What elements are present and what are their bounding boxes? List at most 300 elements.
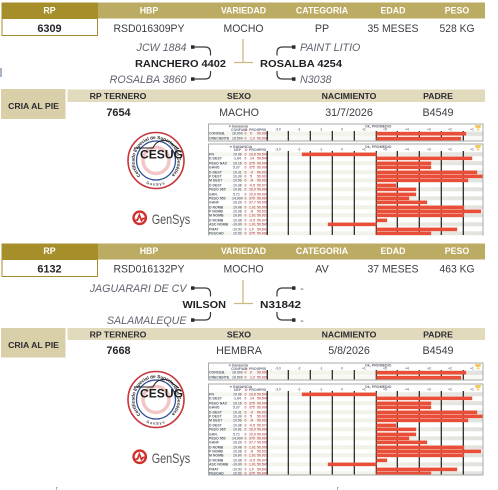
panel: trait rows: 0 bbox=[244, 414, 246, 418]
value row: animal data: 35 MESES bbox=[368, 23, 418, 35]
value row: animal data bbox=[2, 18, 474, 36]
panel: trait rows: 50.545 bbox=[257, 222, 268, 226]
panel: trait rows: PRS bbox=[259, 388, 267, 392]
seal: CESUG certificate bbox=[127, 132, 185, 190]
section: cria al pie 7654 bbox=[1, 89, 485, 119]
panel: trait rows: 14.000 bbox=[232, 196, 243, 200]
panel: trait rows: 10.20 bbox=[233, 440, 242, 444]
panel: trait rows: 10.39 bbox=[233, 414, 242, 418]
panel: trait rows: 0 bbox=[244, 188, 246, 192]
panel: trait rows: 50.000 bbox=[257, 432, 268, 436]
section: cria al pie 7668: B4549 bbox=[423, 345, 454, 357]
panel: summary rows: PROG bbox=[249, 367, 260, 371]
panel: trait rows: +2 bbox=[448, 388, 452, 392]
panel: trait rows: D NOMB bbox=[209, 446, 224, 450]
header bar: animal data: RP bbox=[43, 6, 56, 16]
panel: trait rows: 10.0 bbox=[249, 428, 256, 432]
pedigree diagram: JCW 1884 bbox=[136, 42, 187, 54]
panel: summary rows bbox=[208, 363, 483, 380]
panel: summary rows: PROG bbox=[249, 128, 260, 132]
header bar: animal data: PESO bbox=[445, 6, 469, 16]
value row: animal data: RSD016309PY bbox=[114, 23, 184, 35]
panel: trait rows: 50.070 bbox=[257, 458, 268, 462]
panel: summary rows: -3.0 bbox=[275, 128, 281, 132]
panel: trait rows: 50.037 bbox=[257, 170, 268, 174]
panel: trait rows: P DEST bbox=[209, 414, 222, 418]
panel: trait rows: -10.52 bbox=[232, 468, 242, 472]
panel: trait rows: 50.037 bbox=[257, 454, 268, 458]
panel: trait rows: 0 bbox=[244, 222, 246, 226]
panel: summary rows: PRS bbox=[259, 128, 267, 132]
panel: summary rows: +3 bbox=[427, 366, 431, 370]
seal: CESUG certificate: Certificado Especial de Superioridad Genética bbox=[131, 136, 181, 178]
panel: trait rows: -0.5 bbox=[249, 424, 255, 428]
panel: trait rows: 0 bbox=[341, 148, 343, 152]
panel: trait rows bbox=[208, 144, 483, 236]
panel: summary rows: D bbox=[245, 367, 248, 371]
panel: trait rows: 10.38 bbox=[233, 184, 242, 188]
panel: trait rows: +1 bbox=[470, 388, 474, 392]
panel: trait rows: 50.037 bbox=[257, 178, 268, 182]
panel: trait rows: 10.0 bbox=[249, 188, 256, 192]
value row: animal data: 37 MESES bbox=[368, 264, 418, 276]
panel: trait rows: -0 bbox=[250, 410, 253, 414]
panel: trait rows: +5 bbox=[383, 148, 387, 152]
section: cria al pie 7668: SEXO bbox=[227, 330, 251, 340]
panel: trait rows: 5.37 bbox=[233, 166, 240, 170]
panel: trait rows: 50.070 bbox=[257, 218, 268, 222]
panel: summary rows: +4 bbox=[405, 366, 409, 370]
panel: trait rows: 50.500 bbox=[257, 152, 268, 156]
panel: trait rows: 10.08 bbox=[233, 446, 242, 450]
panel: trait rows: DEP bbox=[234, 148, 242, 152]
panel: summary rows: +1 bbox=[362, 366, 366, 370]
panel: trait rows: 0 bbox=[244, 472, 246, 476]
section: cria al pie 7654: NACIMIENTO bbox=[322, 91, 377, 101]
panel: trait rows: 0 bbox=[244, 184, 246, 188]
panel: summary rows: 50.000 bbox=[257, 132, 268, 136]
panel: trait rows: 10.39 bbox=[233, 174, 242, 178]
panel: trait rows: -1.64 bbox=[233, 396, 241, 400]
panel: trait rows: D bbox=[245, 148, 248, 152]
panel: trait rows: D DEST bbox=[209, 424, 223, 428]
panel: trait rows: 0 bbox=[244, 454, 246, 458]
header bar: animal data: EDAD bbox=[381, 246, 405, 256]
seal: CESUG certificate: CESUG bbox=[140, 387, 183, 400]
panel: trait rows: 1.01 bbox=[249, 446, 256, 450]
panel: trait rows: 10.38 bbox=[233, 450, 242, 454]
panel: trait rows: 0 bbox=[244, 196, 246, 200]
panel: summary rows: Ok, PROMEDIO bbox=[365, 364, 392, 368]
panel: trait rows: D DEST bbox=[209, 184, 223, 188]
pedigree diagram: N31842 bbox=[260, 300, 301, 311]
panel: trait rows: 50.000 bbox=[257, 200, 268, 204]
panel: trait rows: 375 bbox=[249, 406, 255, 410]
panel: summary rows: +1 bbox=[470, 128, 474, 132]
panel: trait rows: M NOMB bbox=[209, 454, 224, 458]
panel: trait rows: 0 bbox=[244, 192, 246, 196]
section: cria al pie 7668: PADRE bbox=[423, 330, 453, 340]
panel: trait rows: +5 bbox=[383, 388, 387, 392]
panel: trait rows: 5 bbox=[250, 414, 252, 418]
panel: trait rows: 10.38 bbox=[233, 458, 242, 462]
seal: CESUG certificate: CESUG bbox=[140, 148, 183, 161]
panel: trait rows: 1.01 bbox=[249, 206, 256, 210]
section: cria al pie 7654: CRIA AL PIE bbox=[8, 101, 59, 111]
panel: trait rows: 50.540 bbox=[257, 156, 268, 160]
panel: trait rows: ASC NOMB bbox=[209, 222, 229, 226]
panel: trait rows: 0 bbox=[244, 446, 246, 450]
panel: trait rows: PN bbox=[209, 392, 214, 396]
panel: trait rows: 0 bbox=[244, 418, 246, 422]
value row: animal data: RSD016132PY bbox=[114, 264, 184, 276]
panel: trait rows: PMAT bbox=[209, 228, 220, 232]
panel: trait rows: 10.6 bbox=[249, 392, 256, 396]
section: cria al pie 7654: RP TERNERO bbox=[90, 91, 147, 101]
panel: trait rows: 50.077 bbox=[257, 424, 268, 428]
panel: trait rows: 0 bbox=[244, 170, 246, 174]
panel: trait rows: 1.01 bbox=[249, 214, 256, 218]
panel: trait rows: 0 bbox=[244, 232, 246, 236]
panel: trait rows: 50.000 bbox=[257, 472, 268, 476]
panel: trait rows: PESO 365 bbox=[209, 188, 226, 192]
panel: summary rows: 16.000 bbox=[232, 132, 243, 136]
panel: trait rows: 375 bbox=[249, 232, 255, 236]
pedigree diagram: PAINT LITIO bbox=[300, 42, 361, 54]
panel: trait rows: DEP bbox=[234, 388, 242, 392]
section: cria al pie 7668: CRIA AL PIE bbox=[8, 340, 59, 350]
panel: trait rows: 1.0 bbox=[249, 228, 254, 232]
panel: trait rows: D NOMB bbox=[209, 458, 224, 462]
seal: CESUG certificate: GenSys bbox=[146, 182, 164, 186]
panel: trait rows: 50.000 bbox=[257, 428, 268, 432]
panel: summary rows: +5 bbox=[383, 128, 387, 132]
panel: trait rows: 50.037 bbox=[257, 410, 268, 414]
panel: trait rows: 50.000 bbox=[257, 406, 268, 410]
panel: trait rows: 0 bbox=[244, 462, 246, 466]
header bar: animal data: HBP bbox=[140, 6, 158, 16]
panel: trait rows: ASC NOMB bbox=[209, 462, 229, 466]
panel: trait rows: -2 bbox=[298, 148, 301, 152]
panel: trait rows: 10.31 bbox=[233, 410, 242, 414]
panel: trait rows: 0 bbox=[244, 166, 246, 170]
panel: trait rows: 5.37 bbox=[233, 406, 240, 410]
panel: summary rows: Ok, PROMEDIO bbox=[365, 124, 392, 128]
panel: summary rows: 50.000 bbox=[257, 137, 268, 141]
panel: summary rows: CONFIAB bbox=[231, 128, 247, 132]
panel: trait rows: -10.52 bbox=[232, 228, 242, 232]
panel: trait rows: M DEST bbox=[209, 418, 223, 422]
section: cria al pie 7654: SEXO bbox=[227, 91, 251, 101]
panel: trait rows: 375 bbox=[249, 436, 255, 440]
panel: trait rows: 50.000 bbox=[257, 188, 268, 192]
panel: trait rows: 5.71 bbox=[233, 192, 240, 196]
panel: trait rows: 10.20 bbox=[233, 200, 242, 204]
section: cria al pie 7654: 31/7/2026 bbox=[325, 107, 373, 119]
seal: CESUG certificate: GenSys bbox=[146, 420, 164, 426]
panel: summary rows: +2 bbox=[448, 366, 452, 370]
section: cria al pie 7668: 7668 bbox=[106, 345, 131, 357]
panel: trait rows: 0 bbox=[244, 178, 246, 182]
panel: trait rows: 50.000 bbox=[257, 402, 268, 406]
panel: trait rows: -3.0 bbox=[275, 148, 281, 152]
panel: trait rows: 0 bbox=[244, 468, 246, 472]
panel: trait rows: -1.64 bbox=[233, 156, 241, 160]
header bar: animal data: PESO bbox=[445, 246, 469, 256]
panel: trait rows: 10.60 bbox=[233, 454, 242, 458]
section: cria al pie 7668: NACIMIENTO bbox=[322, 330, 377, 340]
panel: trait rows: ▾ GANANCIA bbox=[229, 145, 253, 149]
panel: trait rows bbox=[208, 384, 483, 476]
panel: trait rows: 50.077 bbox=[257, 184, 268, 188]
panel: summary rows: CONCEB. bbox=[209, 371, 225, 375]
panel: trait rows: -10.60 bbox=[232, 462, 242, 466]
section: animal 6309 bbox=[2, 2, 485, 86]
value row: animal data: 6132 bbox=[37, 264, 62, 276]
panel: trait rows: D DEST bbox=[209, 170, 223, 174]
panel: trait rows: D NOMB bbox=[209, 206, 224, 210]
panel: summary rows: 50.000 bbox=[257, 376, 268, 380]
panel: summary rows: CONFIAB bbox=[231, 367, 247, 371]
panel: trait rows: 0 bbox=[244, 206, 246, 210]
panel: trait rows: +2 bbox=[448, 148, 452, 152]
panel: trait rows: 0 bbox=[244, 402, 246, 406]
pedigree diagram bbox=[110, 39, 361, 86]
panel: trait rows: -0.5 bbox=[249, 458, 255, 462]
panel: trait rows: 0 bbox=[244, 200, 246, 204]
panel: summary rows: +2 bbox=[448, 128, 452, 132]
panel: trait rows: P DEST bbox=[209, 174, 222, 178]
panel: trait rows: GANO bbox=[209, 406, 220, 410]
panel: trait rows: 50.000 bbox=[257, 166, 268, 170]
panel: summary rows: 0 bbox=[244, 137, 246, 141]
panel: trait rows: 37.7 bbox=[249, 200, 256, 204]
panel: trait rows: 0 bbox=[244, 458, 246, 462]
value row: animal data: 463 KG bbox=[440, 264, 474, 276]
panel: trait rows: 10.59 bbox=[233, 178, 242, 182]
panel: trait rows: 14 bbox=[250, 396, 254, 400]
panel: trait rows: 50.000 bbox=[257, 162, 268, 166]
panel: trait rows: 0 bbox=[244, 436, 246, 440]
panel: trait rows: 0 bbox=[341, 388, 343, 392]
panel: trait rows: 375 bbox=[249, 162, 255, 166]
panel: summary rows: 0 bbox=[341, 366, 343, 370]
panel: summary rows: +1 bbox=[470, 366, 474, 370]
panel: summary rows: 16.500 bbox=[232, 376, 243, 380]
panel: trait rows: -0 bbox=[250, 170, 253, 174]
panel: trait rows: 10.31 bbox=[233, 170, 242, 174]
panel: trait rows: D DEST bbox=[209, 156, 223, 160]
panel: trait rows: D bbox=[245, 388, 248, 392]
pedigree diagram: N3038 bbox=[300, 74, 332, 86]
panel: trait rows: 10.16 bbox=[233, 162, 242, 166]
panel: trait rows: 50.037 bbox=[257, 174, 268, 178]
panel: trait rows: PESOAD bbox=[209, 232, 224, 236]
panel: summary rows: 0 bbox=[250, 371, 252, 375]
header bar: animal data: CATEGORIA bbox=[296, 6, 349, 16]
panel: trait rows: 50.643 bbox=[257, 468, 268, 472]
pedigree diagram: WILSON bbox=[182, 300, 226, 311]
panel: summary rows: CRECIENTE bbox=[209, 376, 230, 380]
panel: trait rows: D DEST bbox=[209, 396, 223, 400]
value row: animal data: AV bbox=[315, 264, 330, 276]
panel: summary rows: +4 bbox=[405, 128, 409, 132]
panel: trait rows: -2 bbox=[298, 388, 301, 392]
panel: trait rows: +1 bbox=[362, 148, 366, 152]
logo: GenSys bbox=[134, 211, 190, 227]
panel: trait rows: GANO bbox=[209, 166, 220, 170]
panel: trait rows: 50.000 bbox=[257, 232, 268, 236]
panel: trait rows: 0 bbox=[244, 218, 246, 222]
panel: summary rows: CRECIENTE bbox=[209, 137, 230, 141]
panel: trait rows: 14 bbox=[250, 156, 254, 160]
panel: trait rows: 50.643 bbox=[257, 228, 268, 232]
panel: trait rows: 0 bbox=[244, 228, 246, 232]
panel: trait rows: 10.81 bbox=[233, 188, 242, 192]
panel: trait rows: 50.037 bbox=[257, 210, 268, 214]
panel: summary rows: 50.000 bbox=[257, 371, 268, 375]
header bar: animal data: HBP bbox=[140, 246, 158, 256]
panel: trait rows: GANF bbox=[209, 440, 220, 444]
side mark bbox=[0, 68, 2, 77]
panel: trait rows: 14.000 bbox=[232, 436, 243, 440]
section: animal 6132 bbox=[2, 244, 485, 327]
value row: animal data: PP bbox=[315, 23, 329, 35]
section: cria al pie 7654: 7654 bbox=[106, 107, 131, 119]
panel: trait rows: 0 bbox=[244, 428, 246, 432]
panel: trait rows: PESO NAC bbox=[209, 402, 228, 406]
panel: summary rows: -1 bbox=[320, 366, 323, 370]
panel: trait rows: 375 bbox=[249, 166, 255, 170]
panel: trait rows: 0 bbox=[244, 162, 246, 166]
panel: trait rows: PESO 550 bbox=[209, 196, 226, 200]
panel: trait rows: 0 bbox=[244, 396, 246, 400]
panel: trait rows: 5 bbox=[250, 174, 252, 178]
panel: trait rows: PESOAD bbox=[209, 472, 224, 476]
panel: trait rows: 50.000 bbox=[257, 446, 268, 450]
header bar: animal data bbox=[2, 244, 485, 260]
panel: summary rows: ▾ Ganancia bbox=[228, 124, 249, 128]
panel: trait rows: -0.5 bbox=[249, 184, 255, 188]
panel: trait rows: Ok, PROMEDIO bbox=[365, 385, 392, 389]
chart: DEP table 2 bbox=[208, 363, 483, 476]
panel: trait rows: 37.7 bbox=[249, 440, 256, 444]
panel: trait rows: 10.0 bbox=[249, 192, 256, 196]
panel: trait rows: 50.540 bbox=[257, 396, 268, 400]
pedigree diagram: ROSALBA 3860 bbox=[110, 74, 187, 86]
panel: trait rows: +3 bbox=[427, 388, 431, 392]
header bar: animal data: EDAD bbox=[381, 6, 405, 16]
panel: trait rows: 0 bbox=[244, 210, 246, 214]
panel: trait rows: 10.52 bbox=[233, 232, 242, 236]
panel: trait rows: 50.545 bbox=[257, 462, 268, 466]
header bar: animal data bbox=[2, 2, 485, 18]
panel: trait rows: 10.38 bbox=[233, 218, 242, 222]
panel: summary rows: 0 bbox=[341, 128, 343, 132]
panel: trait rows: PROG bbox=[249, 388, 260, 392]
panel: trait rows: 50.037 bbox=[257, 214, 268, 218]
panel: trait rows: 10.60 bbox=[233, 214, 242, 218]
footer marks bbox=[56, 486, 339, 490]
section: cria al pie 7668: HEMBRA bbox=[216, 345, 263, 357]
panel: trait rows: 0 bbox=[244, 424, 246, 428]
section: cria al pie 7654: PADRE bbox=[423, 91, 453, 101]
seal: CESUG certificate: Certificado Especial de Superioridad Genética bbox=[131, 374, 181, 416]
panel: trait rows: -1 bbox=[320, 148, 323, 152]
panel: trait rows: +1 bbox=[362, 388, 366, 392]
panel: summary rows: +3 bbox=[427, 128, 431, 132]
panel: trait rows: -8 bbox=[250, 450, 253, 454]
panel: trait rows: 10.06 bbox=[233, 152, 242, 156]
panel: trait rows: GAN. bbox=[209, 192, 218, 196]
panel: summary rows bbox=[208, 124, 483, 141]
value row: animal data bbox=[2, 260, 474, 276]
panel: trait rows: PMAT bbox=[209, 468, 220, 472]
pedigree diagram: ROSALBA 4254 bbox=[260, 59, 342, 70]
pedigree diagram: - bbox=[300, 315, 304, 327]
section: cria al pie 7654: MACHO bbox=[219, 107, 259, 119]
panel: summary rows: -2 bbox=[298, 366, 301, 370]
panel: trait rows: 375 bbox=[249, 472, 255, 476]
panel: summary rows: 16.500 bbox=[232, 137, 243, 141]
panel: trait rows: 0 bbox=[244, 392, 246, 396]
panel: trait rows: +1 bbox=[470, 148, 474, 152]
panel: trait rows: 0 bbox=[244, 432, 246, 436]
panel: summary rows: PRS bbox=[259, 367, 267, 371]
panel: trait rows: 375 bbox=[249, 402, 255, 406]
panel: trait rows: 1.0 bbox=[249, 468, 254, 472]
panel: trait rows: 10.06 bbox=[233, 392, 242, 396]
panel: trait rows: 0 bbox=[244, 174, 246, 178]
panel: trait rows: D NOMB bbox=[209, 218, 224, 222]
pedigree diagram bbox=[89, 280, 304, 327]
panel: trait rows: 50.500 bbox=[257, 392, 268, 396]
panel: trait rows: D DEST bbox=[209, 410, 223, 414]
panel: trait rows: 0 bbox=[244, 410, 246, 414]
logo: GenSys bbox=[134, 450, 190, 466]
panel: trait rows: 0 bbox=[244, 156, 246, 160]
panel: trait rows: 10.6 bbox=[249, 152, 256, 156]
panel: trait rows: 1.01 bbox=[249, 222, 256, 226]
panel: trait rows: PESO NAC bbox=[209, 162, 228, 166]
panel: summary rows: ▾ Ganancia bbox=[228, 364, 249, 368]
pedigree diagram: RANCHERO 4402 bbox=[135, 59, 226, 70]
panel: trait rows: 10.16 bbox=[233, 402, 242, 406]
panel: trait rows: 0 bbox=[244, 406, 246, 410]
logo: GenSys: GenSys bbox=[152, 450, 190, 466]
panel: trait rows: PESO 365 bbox=[209, 428, 226, 432]
panel: trait rows: 10.38 bbox=[233, 424, 242, 428]
panel: trait rows: PESO 550 bbox=[209, 436, 226, 440]
logo: GenSys: GenSys bbox=[152, 211, 190, 227]
panel: trait rows: GANF bbox=[209, 200, 220, 204]
panel: trait rows: -3.0 bbox=[275, 388, 281, 392]
panel: trait rows: 50.037 bbox=[257, 414, 268, 418]
section: cria al pie 7654: B4549 bbox=[423, 107, 454, 119]
header bar: animal data: VARIEDAD bbox=[221, 246, 266, 256]
panel: trait rows: 50.037 bbox=[257, 418, 268, 422]
panel: trait rows: 375 bbox=[249, 196, 255, 200]
panel: trait rows: 10.0 bbox=[249, 432, 256, 436]
value row: animal data: MOCHO bbox=[224, 23, 264, 35]
panel: trait rows: P NOMB bbox=[209, 450, 223, 454]
pedigree diagram: JAGUARARI DE CV bbox=[89, 283, 187, 295]
panel: trait rows: -8 bbox=[250, 178, 253, 182]
header bar: animal data: RP bbox=[43, 246, 56, 256]
panel: summary rows: CONCEB. bbox=[209, 132, 225, 136]
panel: trait rows: 0 bbox=[244, 152, 246, 156]
panel: trait rows: 50.000 bbox=[257, 196, 268, 200]
